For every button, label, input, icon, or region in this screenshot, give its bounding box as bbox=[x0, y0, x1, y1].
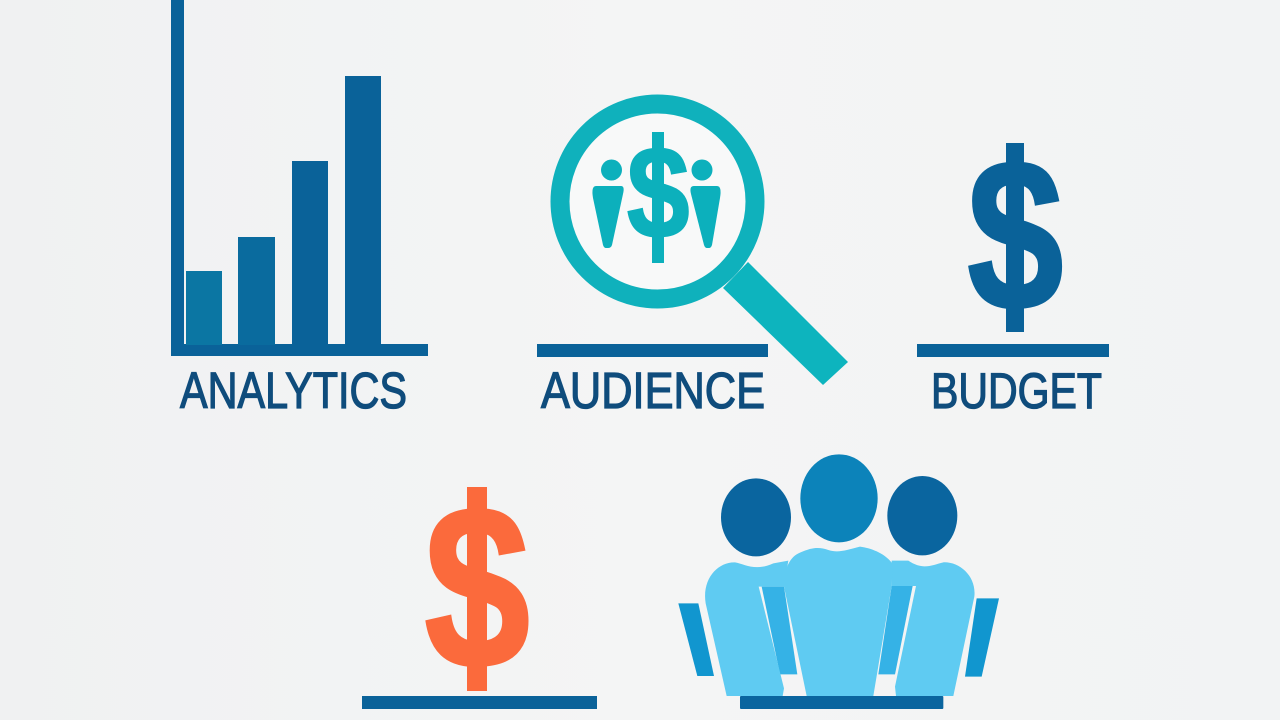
label: analytics: ANALYTICS bbox=[180, 362, 407, 419]
bar chart bbox=[171, 0, 428, 356]
table bar bbox=[740, 696, 943, 709]
divider bar: budget bbox=[917, 344, 1109, 357]
centre person body bbox=[784, 547, 893, 696]
divider bar: orange dollar bbox=[362, 696, 597, 709]
right person body bbox=[892, 561, 975, 696]
icon: team of three people bbox=[678, 454, 999, 709]
panel: budget bbox=[917, 113, 1109, 419]
panel: analytics bbox=[171, 0, 428, 419]
icon: dollar sign in lens: $ bbox=[627, 120, 690, 267]
icon: right person bbox=[690, 160, 721, 248]
inner right slat bbox=[878, 586, 913, 674]
panel: audience bbox=[537, 104, 848, 419]
centre head bbox=[800, 454, 878, 542]
label: audience: AUDIENCE bbox=[541, 362, 765, 419]
icon: blue dollar sign: $ bbox=[967, 113, 1064, 356]
inner left slat bbox=[762, 587, 797, 674]
right head bbox=[887, 476, 957, 555]
outer right slat bbox=[965, 598, 999, 677]
panel: orange dollar bbox=[362, 458, 597, 718]
left person body bbox=[705, 561, 788, 696]
outer left slat bbox=[678, 603, 714, 676]
left head bbox=[721, 478, 791, 556]
divider bar: audience bbox=[537, 344, 768, 357]
icon: magnifying glass bbox=[560, 104, 848, 385]
icon: orange dollar sign: $ bbox=[424, 458, 530, 718]
icon: left person bbox=[592, 160, 624, 248]
label: budget: BUDGET bbox=[931, 363, 1102, 419]
